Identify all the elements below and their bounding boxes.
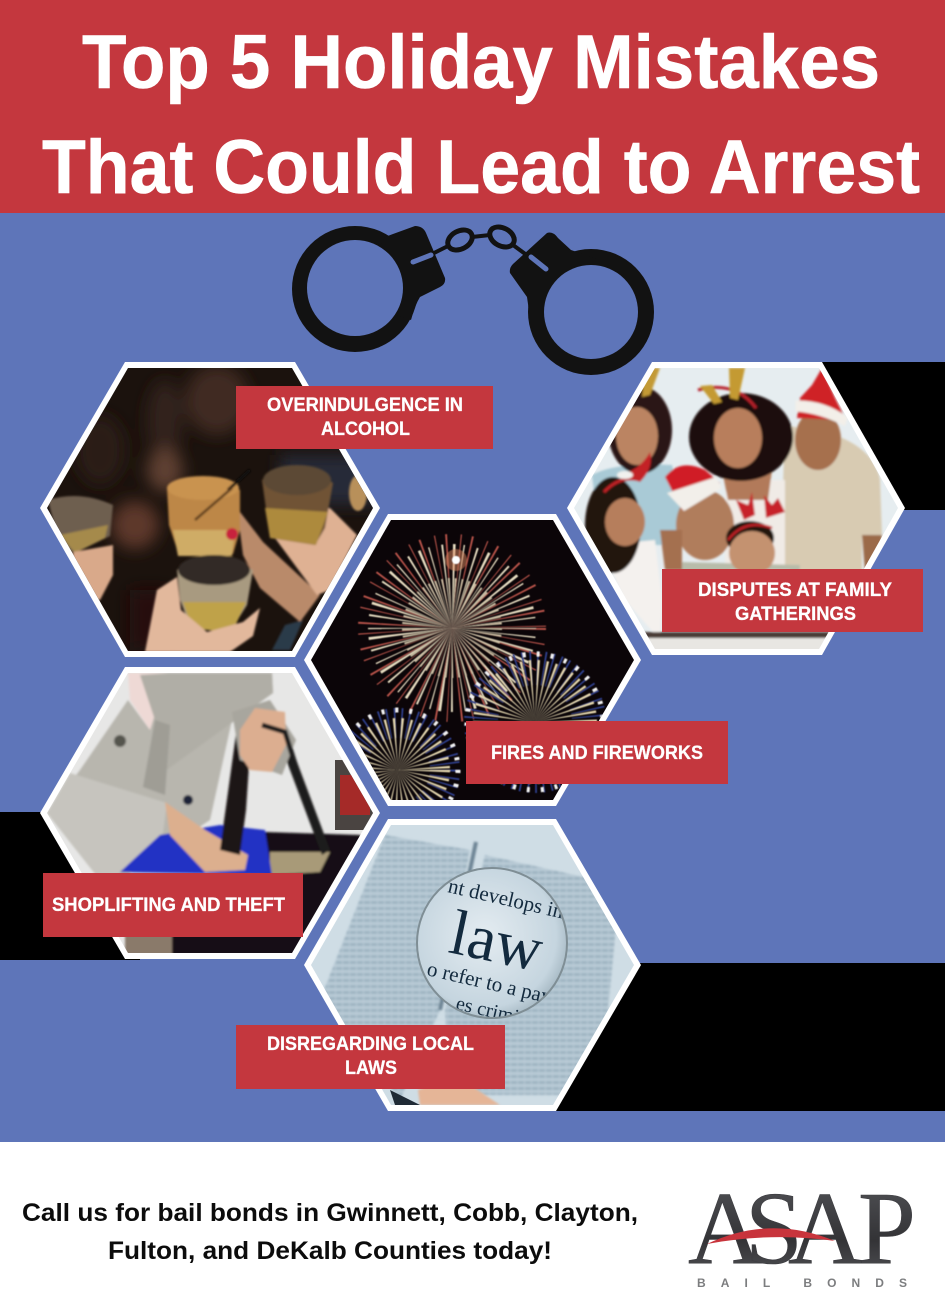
title banner xyxy=(0,0,945,213)
label: disregarding local laws xyxy=(236,1025,505,1089)
label: disregarding local laws: DISREGARDING LOCAL xyxy=(267,1034,474,1055)
sleeve cuff xyxy=(232,700,296,775)
photo hexagon: law magnifying glass: law xyxy=(444,896,549,985)
bottom hand xyxy=(145,577,260,652)
coat xyxy=(76,700,232,873)
icon: handcuffs xyxy=(292,223,654,375)
nail xyxy=(226,528,238,540)
background: white footer xyxy=(0,1142,945,1313)
photo hexagon: law magnifying glass: nt develops in xyxy=(446,873,567,923)
logo: ASAP Bail Bonds: BAIL BONDS xyxy=(697,1276,907,1290)
hand at bottom xyxy=(417,1089,500,1105)
footer call to action: Call us for bail bonds in Gwinnett, Cobb, Clayton, xyxy=(22,1199,638,1227)
bag xyxy=(170,832,375,955)
background: blue panel xyxy=(0,213,945,1142)
left glass xyxy=(48,496,113,553)
label: disputes at family gatherings: GATHERINGS xyxy=(735,604,856,625)
black band: left xyxy=(0,812,140,960)
photo hexagon: law magnifying glass: o refer to a pay xyxy=(425,956,555,1009)
piano xyxy=(640,632,840,638)
title text line 2: That Could Lead to Arrest xyxy=(42,125,920,210)
label: disputes at family gatherings: DISPUTES AT FAMILY xyxy=(698,580,892,601)
label: shoplifting and theft: SHOPLIFTING AND THEFT xyxy=(52,895,285,916)
center glass xyxy=(167,478,240,554)
photo hexagon: shoplifting xyxy=(40,667,380,959)
right hand xyxy=(270,508,357,595)
logo: ASAP Bail Bonds: ASAP xyxy=(688,1171,916,1286)
bottom glass xyxy=(176,568,254,618)
label: overindulgence in alcohol: ALCOHOL xyxy=(321,419,410,440)
burst: blue left xyxy=(350,706,462,800)
photo hexagon: law magnifying glass: es crimi xyxy=(454,992,521,1028)
cloth xyxy=(120,825,272,875)
burst: blue right xyxy=(467,654,603,790)
left hand xyxy=(73,545,113,600)
woman left xyxy=(592,464,690,545)
footer call to action: Fulton, and DeKalb Counties today! xyxy=(108,1237,552,1265)
woman center xyxy=(724,479,786,566)
man right polo xyxy=(780,425,882,580)
far right finger xyxy=(349,475,367,511)
label: disputes at family gatherings xyxy=(662,569,923,632)
label: overindulgence in alcohol xyxy=(236,386,493,449)
photo hexagon: alcohol toast xyxy=(40,362,380,657)
title text line 1: Top 5 Holiday Mistakes xyxy=(82,20,880,105)
photo hexagon: law magnifying glass xyxy=(304,819,641,1111)
hand lower xyxy=(165,802,248,872)
straps xyxy=(218,735,250,856)
man center xyxy=(680,561,800,569)
footer call to action xyxy=(22,1199,638,1265)
burst: red and cream xyxy=(405,549,499,675)
black band: bottom right xyxy=(540,963,945,1111)
label: disregarding local laws: LAWS xyxy=(345,1058,397,1079)
lens xyxy=(417,868,567,1018)
label: overindulgence in alcohol: OVERINDULGENCE IN xyxy=(267,395,463,416)
photo hexagon: family at piano xyxy=(567,362,905,655)
arm xyxy=(237,508,320,622)
little girl xyxy=(733,568,788,569)
right glass xyxy=(261,479,334,540)
girl left xyxy=(611,538,662,634)
label: shoplifting and theft xyxy=(43,873,303,937)
book pages xyxy=(320,835,620,1100)
label: fires and fireworks xyxy=(466,721,728,784)
hand upper xyxy=(240,708,286,772)
photo hexagon: fireworks xyxy=(304,514,641,830)
label: fires and fireworks: FIRES AND FIREWORKS xyxy=(491,743,703,764)
black band: top right xyxy=(780,362,945,510)
